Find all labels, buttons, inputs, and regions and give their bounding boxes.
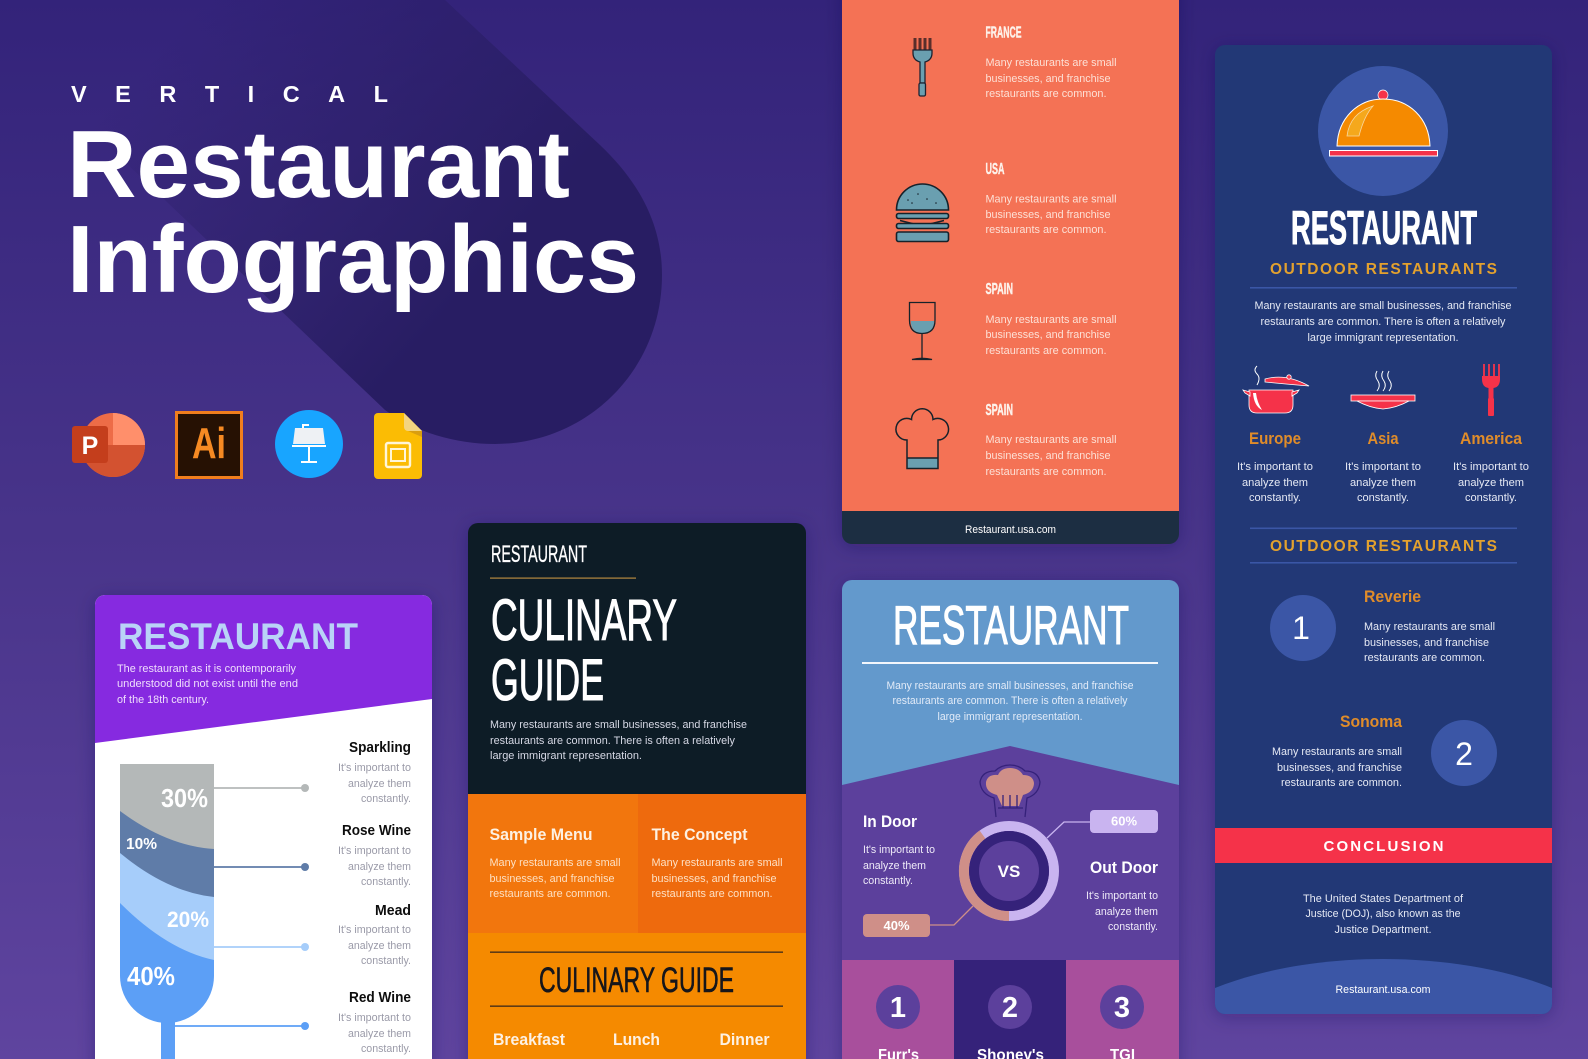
column 1: Furr's xyxy=(842,960,954,1059)
item: france: businesses, and franchise xyxy=(986,73,1110,85)
icon: chef hat with steam xyxy=(980,765,1040,817)
item: reverie: Many restaurants are small xyxy=(1364,621,1495,633)
blue header xyxy=(842,580,1179,800)
item: rose wine: Rose Wine xyxy=(342,822,411,839)
item: sparkling xyxy=(338,739,411,805)
item: spain again: restaurants are common. xyxy=(986,466,1106,478)
column 1: Furr's: 1 xyxy=(890,992,906,1024)
intro text xyxy=(490,719,747,762)
gold rule xyxy=(490,578,636,579)
panel body xyxy=(95,595,432,1059)
item: europe: Europe xyxy=(1249,429,1301,448)
item: spain: Many restaurants are small xyxy=(986,314,1116,326)
icon: Illustrator: Ai xyxy=(192,419,226,468)
footer bar xyxy=(842,511,1179,544)
section heading with rules: OUTDOOR RESTAURANTS xyxy=(1270,538,1497,555)
item: usa: USA xyxy=(986,161,1005,178)
item: sparkling: constantly. xyxy=(361,793,411,805)
callout: 60%: 60% xyxy=(1111,814,1137,828)
panel: coral countries xyxy=(842,0,1179,544)
chart: wine bottle: 20% xyxy=(167,907,209,932)
intro text: large immigrant representation. xyxy=(490,750,642,762)
item: america: constantly. xyxy=(1465,492,1517,504)
icon: pot xyxy=(1243,366,1309,413)
item: usa: restaurants are common. xyxy=(986,224,1106,236)
intro text: large immigrant representation. xyxy=(938,711,1082,723)
block: sample menu xyxy=(468,794,638,933)
panel intro text: of the 18th century. xyxy=(117,694,209,706)
item: usa: businesses, and franchise xyxy=(986,209,1110,221)
block: the concept: restaurants are common. xyxy=(652,888,772,900)
donut chart: VS xyxy=(998,862,1020,881)
item: mead: constantly. xyxy=(361,955,411,967)
chart: wine bottle: 10% xyxy=(126,836,157,853)
conclusion text xyxy=(1303,893,1464,936)
item: in door: analyze them xyxy=(863,860,926,872)
icon: burger xyxy=(896,184,948,242)
item: red wine: Red Wine xyxy=(349,989,411,1006)
icon: cloche xyxy=(1318,66,1448,196)
coral body xyxy=(842,0,1179,511)
conclusion banner: CONCLUSION xyxy=(1324,838,1444,855)
panel intro text: The restaurant as it is contemporarily xyxy=(117,663,296,675)
item: in door: In Door xyxy=(863,812,917,831)
main heading xyxy=(491,588,677,713)
item: spain again: Many restaurants are small xyxy=(986,434,1116,446)
item: red wine: constantly. xyxy=(361,1043,411,1055)
block: culinary guide menu xyxy=(468,933,806,1059)
icon: wine glass xyxy=(910,302,935,360)
item: rose wine: It's important to xyxy=(338,845,411,857)
item: france xyxy=(986,24,1116,100)
main heading: CULINARY xyxy=(491,588,677,653)
item: usa xyxy=(986,161,1116,236)
item: spain: businesses, and franchise xyxy=(986,329,1110,341)
block: sample menu: businesses, and franchise xyxy=(490,873,614,885)
item: europe: analyze them xyxy=(1242,477,1308,489)
column 2: Shoney's: 2 xyxy=(1002,992,1018,1024)
chart: wine bottle: 40% xyxy=(127,961,175,991)
title line 1: Restaurant xyxy=(67,111,570,218)
intro text: large immigrant representation. xyxy=(1308,332,1458,344)
decorative blob behind title xyxy=(0,0,662,444)
item: reverie: 1 xyxy=(1292,610,1310,646)
block: the concept: Many restaurants are small xyxy=(652,857,782,869)
item: spain xyxy=(986,281,1116,357)
block: culinary guide menu: Dinner xyxy=(720,1030,770,1049)
intro text xyxy=(1254,300,1512,344)
item: red wine: It's important to xyxy=(338,1012,411,1024)
block: sample menu: restaurants are common. xyxy=(490,888,610,900)
intro text: Many restaurants are small businesses, and franchise xyxy=(490,719,747,731)
icon: red fork xyxy=(1482,364,1500,416)
block: the concept: The Concept xyxy=(652,825,748,844)
purple section xyxy=(842,746,1179,962)
item: rose wine: constantly. xyxy=(361,876,411,888)
item: sparkling: analyze them xyxy=(348,778,411,790)
panel intro text xyxy=(117,663,298,706)
intro text: restaurants are common. There is often a relatively xyxy=(490,735,735,747)
block: culinary guide menu: Lunch xyxy=(613,1030,660,1049)
item: in door: It's important to xyxy=(863,844,935,856)
conclusion text: The United States Department of xyxy=(1303,893,1464,905)
intro text: restaurants are common. There is often a relatively xyxy=(1260,316,1506,328)
conclusion text: Justice Department. xyxy=(1334,924,1432,936)
dark header xyxy=(468,523,806,794)
small heading: RESTAURANT xyxy=(491,541,587,568)
item: red wine xyxy=(338,989,411,1055)
subheading rule xyxy=(1250,287,1517,289)
item: spain: SPAIN xyxy=(986,281,1013,298)
icon: fork xyxy=(913,38,932,96)
icon: Google Slides xyxy=(374,413,422,479)
icon: Illustrator xyxy=(176,412,242,478)
heading rule xyxy=(862,662,1158,664)
item: rose wine xyxy=(338,822,411,888)
item: spain again: SPAIN xyxy=(986,402,1013,419)
block: sample menu: Sample Menu xyxy=(490,825,592,844)
panel intro text: understood did not exist until the end xyxy=(117,678,298,690)
block: culinary guide menu: CULINARY GUIDE xyxy=(539,961,734,1000)
panel header xyxy=(95,595,432,743)
column 3: TGI: 3 xyxy=(1114,992,1130,1024)
intro text: Many restaurants are small businesses, and franchise xyxy=(886,680,1134,692)
panel heading: RESTAURANT xyxy=(893,594,1129,656)
navy body xyxy=(1215,45,1552,1014)
item: asia: It's important to xyxy=(1345,461,1421,473)
panel: outdoor restaurants xyxy=(1215,45,1552,1014)
panel: culinary guide xyxy=(468,523,806,1059)
item: asia: Asia xyxy=(1368,429,1399,448)
item: out door: It's important to xyxy=(1086,890,1158,902)
item: mead: It's important to xyxy=(338,924,411,936)
item: out door: Out Door xyxy=(1090,858,1158,877)
item: sonoma: Sonoma xyxy=(1340,712,1403,731)
footer arc xyxy=(1215,959,1552,1014)
item: france: Many restaurants are small xyxy=(986,57,1116,69)
chart: wine bottle xyxy=(120,764,214,1059)
item: spain again xyxy=(986,402,1116,478)
item: sonoma xyxy=(1272,712,1497,789)
item: usa: Many restaurants are small xyxy=(986,194,1116,206)
icon: chef hat xyxy=(896,409,949,469)
item: asia: constantly. xyxy=(1357,492,1409,504)
subheading: OUTDOOR RESTAURANTS xyxy=(1270,261,1497,278)
icon: Keynote xyxy=(275,410,343,478)
block: the concept xyxy=(638,794,806,933)
item: in door xyxy=(863,812,935,887)
item: europe: It's important to xyxy=(1237,461,1313,473)
eyebrow: vertical: VERTICAL xyxy=(71,81,388,107)
item: spain: restaurants are common. xyxy=(986,345,1106,357)
item: rose wine: analyze them xyxy=(348,861,411,873)
block: sample menu: Many restaurants are small xyxy=(490,857,620,869)
footer bar: Restaurant.usa.com xyxy=(965,524,1056,536)
title block xyxy=(67,81,639,313)
icon: PowerPoint xyxy=(72,413,145,477)
icon: wok xyxy=(1351,371,1415,409)
item: america xyxy=(1453,429,1529,504)
block: culinary guide menu: Breakfast xyxy=(493,1030,565,1049)
item: red wine: analyze them xyxy=(348,1028,411,1040)
icon: PowerPoint: P xyxy=(82,432,98,460)
panel heading: RESTAURANT xyxy=(118,616,358,657)
item: europe: constantly. xyxy=(1249,492,1301,504)
item: europe xyxy=(1237,429,1313,504)
callout: 60% xyxy=(1047,810,1158,838)
intro text: restaurants are common. There is often a relatively xyxy=(892,695,1128,707)
title line 2: Infographics xyxy=(67,206,639,313)
main heading: GUIDE xyxy=(491,648,604,713)
item: out door: analyze them xyxy=(1095,906,1158,918)
item: sonoma: Many restaurants are small xyxy=(1272,746,1402,758)
item: mead: analyze them xyxy=(348,940,411,952)
chart: wine bottle: 30% xyxy=(161,783,208,813)
donut chart xyxy=(964,826,1054,916)
item: sparkling: It's important to xyxy=(338,762,411,774)
intro text xyxy=(886,680,1134,723)
panel: purple wine chart xyxy=(95,595,432,1059)
item: in door: constantly. xyxy=(863,875,913,887)
conclusion text: Justice (DOJ), also known as the xyxy=(1306,908,1460,920)
column 2: Shoney's xyxy=(954,960,1066,1059)
conclusion banner xyxy=(1215,828,1552,863)
leader lines xyxy=(175,784,309,1030)
item: sonoma: 2 xyxy=(1455,736,1473,772)
item: sonoma: businesses, and franchise xyxy=(1277,762,1402,774)
item: mead xyxy=(338,902,411,967)
item: france: FRANCE xyxy=(986,24,1022,42)
item: sparkling: Sparkling xyxy=(349,739,411,756)
item: america: It's important to xyxy=(1453,461,1529,473)
footer arc: Restaurant.usa.com xyxy=(1336,984,1430,996)
callout: 40% xyxy=(863,906,973,937)
item: reverie: Reverie xyxy=(1364,587,1421,606)
item: spain again: businesses, and franchise xyxy=(986,450,1110,462)
item: france: restaurants are common. xyxy=(986,88,1106,100)
item: reverie: businesses, and franchise xyxy=(1364,637,1489,649)
item: asia xyxy=(1345,429,1421,504)
item: mead: Mead xyxy=(375,902,411,919)
column 3: TGI xyxy=(1066,960,1179,1059)
item: out door xyxy=(1086,858,1158,933)
software icons row xyxy=(72,410,422,479)
block: the concept: businesses, and franchise xyxy=(652,873,776,885)
item: asia: analyze them xyxy=(1350,477,1416,489)
item: america: analyze them xyxy=(1458,477,1524,489)
callout: 40%: 40% xyxy=(883,918,910,933)
item: out door: constantly. xyxy=(1108,921,1158,933)
item: reverie xyxy=(1270,587,1495,664)
item: reverie: restaurants are common. xyxy=(1364,652,1485,664)
item: sonoma: restaurants are common. xyxy=(1281,777,1402,789)
panel: in door vs out door xyxy=(842,580,1179,1059)
item: america: America xyxy=(1460,429,1522,448)
intro text: Many restaurants are small businesses, and franchise xyxy=(1254,300,1512,312)
